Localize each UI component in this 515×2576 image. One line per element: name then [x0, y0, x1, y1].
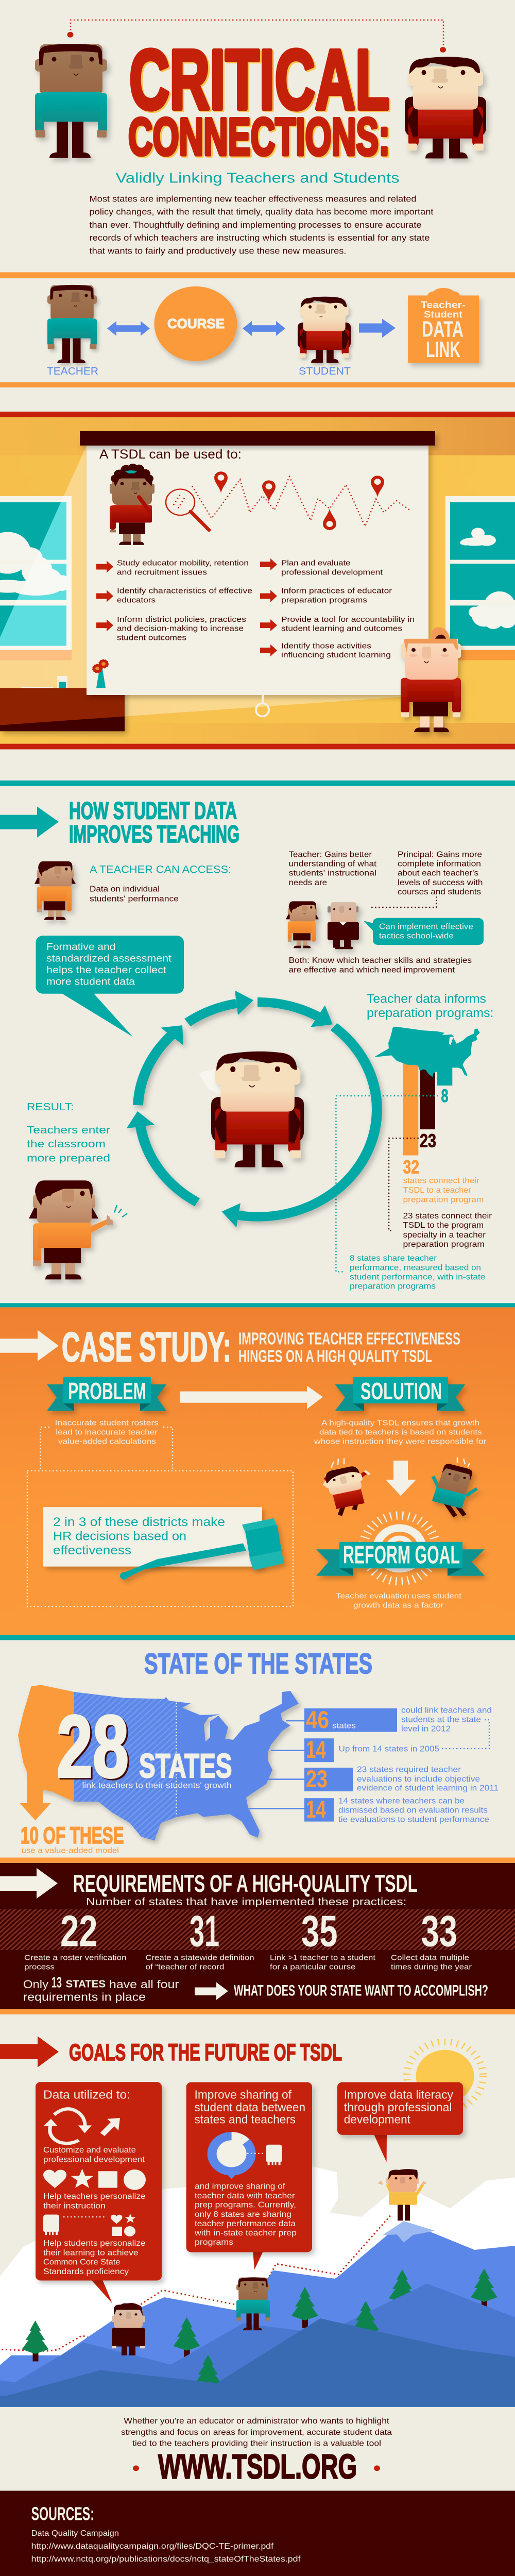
teal stats text: 8 states share teacher [350, 1254, 437, 1263]
ribbon: solution: SOLUTION [360, 1378, 442, 1404]
speech bubble: implement tactics [364, 918, 484, 945]
desk [0, 688, 125, 731]
panel: sources [0, 2491, 515, 2576]
icon: map pin 2 [262, 480, 276, 502]
ten of these callout: 10 OF THESE [21, 1823, 124, 1849]
arrow: problem to solution [180, 1386, 323, 1409]
goal box 2: improve sharing: Improve sharing of [194, 2089, 291, 2102]
teal stats text: preparation programs [350, 1282, 436, 1291]
stat: 46 states: states [332, 1721, 356, 1730]
intro paragraph: than ever. Thoughtfully defining and implementing processes to ensure accurate [90, 220, 421, 230]
stat: 23 evaluations: 23 states required teacher [357, 1765, 461, 1774]
heading: GOALS FOR THE FUTURE OF TSDL [69, 2040, 342, 2066]
motion marks [114, 1205, 127, 1217]
stat: 23 evaluations [267, 1765, 499, 1793]
tree [471, 2268, 497, 2309]
panel: how student data improves teaching [0, 781, 515, 1307]
goal box 3: data literacy: development [344, 2113, 410, 2126]
thirteen states callout: requirements in place [23, 1991, 146, 2004]
stat: 14 up from 2005: Up from 14 states in 2005 [338, 1744, 439, 1753]
mountains: middle range [0, 2283, 515, 2407]
practice descriptions: Create a roster verification [24, 1954, 126, 1962]
list: left column: and decision-making to increase [117, 624, 244, 633]
teacher gains text: needs are [289, 878, 327, 887]
icon: student with paper [199, 1052, 304, 1167]
icon: presenter woman [401, 627, 461, 732]
goal box 2: improve sharing: student data between [194, 2101, 305, 2114]
ribbon: reform goal [316, 1540, 485, 1576]
stat: 14 dismissals: tie evaluations to student performance [338, 1815, 489, 1824]
goal box 2: improve sharing: only 8 states are sharing [195, 2210, 291, 2219]
problem text: value-added calculations [58, 1437, 156, 1446]
arrow: course to student [243, 321, 285, 336]
problem text [55, 1419, 159, 1446]
orange stats text: states connect their [403, 1176, 480, 1185]
arrow: ten of these [20, 1770, 51, 1820]
teacher label: TEACHER [47, 365, 98, 377]
goal box 1: data utilized: Customize and evaluate [43, 2146, 136, 2155]
speech bubble: formative assessment: Formative and [46, 942, 115, 953]
heading: STATE OF THE STATES [144, 1648, 372, 1680]
thirteen states callout: have all four [109, 1978, 179, 1991]
mountains: front range [0, 2318, 515, 2407]
icon: large student character [405, 57, 486, 158]
screen heading: A TSDL can be used to: [99, 447, 242, 462]
solution text [314, 1419, 486, 1446]
section arrow [0, 2036, 59, 2067]
icon: woman teacher beside principal [286, 901, 319, 948]
clipboard: teacher-student data link: Teacher- [421, 300, 466, 311]
clipboard: teacher-student data link [408, 288, 479, 363]
thirteen states callout: STATES [65, 1978, 106, 1990]
icon: magnifying glass [166, 489, 209, 530]
stat: 14 dismissals [249, 1796, 489, 1824]
goal box 2: improve sharing: prep programs. Currently, [195, 2200, 296, 2209]
practice descriptions: Collect data multiple [391, 1954, 469, 1962]
list: right column: Provide a tool for accountability in [281, 616, 415, 624]
28 states callout: 28 [58, 1699, 130, 1798]
course circle: COURSE [167, 316, 225, 331]
list: left column: student outcomes [117, 634, 186, 642]
panel: state of the states [18, 1648, 499, 1855]
heading: HOW STUDENT DATA [69, 798, 237, 824]
teacher can access: students' performance [90, 894, 179, 903]
bar chart: state counts: 23 [420, 1131, 436, 1151]
course circle [154, 286, 237, 361]
dark stats text: 23 states connect their [403, 1212, 492, 1221]
thirteen states callout [23, 1974, 179, 2004]
closing text [121, 2417, 392, 2448]
goal box 1: data utilized: Standards proficiency [43, 2267, 129, 2276]
list: left column [96, 559, 252, 642]
icon: small teacher [47, 285, 97, 363]
bar chart: state counts: 8 [441, 1086, 448, 1106]
stat: 23 evaluations: evidence of student learning in 2011 [357, 1784, 499, 1793]
result text: RESULT: [27, 1100, 74, 1113]
speech bubble: implement tactics: tactics school-wide [379, 931, 454, 940]
icon: vase with flowers [93, 659, 108, 688]
list: right column: student learning and outcomes [281, 624, 402, 633]
sources heading: SOURCES: [31, 2504, 94, 2524]
snowcap [383, 2221, 435, 2243]
card: HR decisions: 2 in 3 of these districts make [53, 1515, 225, 1529]
problem text: lead to inaccurate teacher [56, 1428, 158, 1436]
teal stats text: performance, measured based on [350, 1263, 481, 1272]
goal box 3: data literacy: through professional [344, 2101, 452, 2114]
thirteen states callout: 13 [52, 1974, 62, 1991]
dark stats text: TSDL to the program [403, 1221, 484, 1230]
goal box 2: improve sharing: states and teachers [194, 2113, 296, 2126]
bar chart: state counts: 32 [403, 1157, 419, 1178]
icon: radiating sun [363, 1515, 436, 1581]
both text: Both: Know which teacher skills and strategies [289, 956, 472, 965]
sources list: http://www.dataqualitycampaign.org/files/DQC-TE-primer.pdf [31, 2542, 274, 2551]
heading: IMPROVES TEACHING [69, 821, 239, 848]
icon: map pin 4 [371, 476, 384, 497]
icon: cheering teacher [432, 1463, 477, 1516]
list: left column: Inform district policies, practices [117, 616, 246, 624]
practice descriptions: Create a statewide definition [145, 1954, 254, 1962]
goal box 1: data utilized: their learning to achieve [43, 2248, 138, 2257]
cycle arrows [127, 990, 377, 1227]
stat: 14 dismissals: 14 states where teachers can be [338, 1797, 465, 1805]
icon: principal [328, 902, 359, 949]
principal gains text: about each teacher's [398, 869, 478, 878]
practice descriptions: for a particular course [270, 1963, 356, 1971]
result text: the classroom [27, 1138, 106, 1150]
list: left column: Study educator mobility, retention [117, 559, 249, 567]
icon: girl thinking [110, 464, 154, 545]
closing text: Whether you're an educator or administrator who wants to highlight [124, 2417, 389, 2426]
subheading: Number of states that have implemented these practices: [86, 1895, 406, 1908]
sources list: http://www.nctq.org/p/publications/docs/nctq_stateOfTheStates.pdf [31, 2555, 301, 2564]
teal stats text: student performance, with in-state [350, 1273, 486, 1281]
arrow: student to data link [359, 319, 396, 338]
map of the United States [18, 1685, 299, 1841]
card: HR decisions [43, 1507, 262, 1567]
icon: teacher on the mountain [236, 2277, 270, 2330]
icon: map pin 3 [323, 509, 336, 530]
arrow [195, 1982, 228, 2000]
28 states callout: 28 [57, 1698, 129, 1796]
numbers: 22 [60, 1907, 97, 1956]
clipboard: teacher-student data link: Student [424, 310, 463, 320]
dark stats text: preparation program [403, 1240, 485, 1249]
numbers: 31 [190, 1907, 219, 1956]
result text: Teachers enter [27, 1124, 110, 1136]
tree [173, 2317, 200, 2358]
section arrow [0, 806, 59, 838]
speech bubble: formative assessment: helps the teacher collect [46, 965, 166, 976]
panel: data link diagram [0, 272, 515, 387]
numbers: 33 [421, 1907, 457, 1956]
dark stats text [403, 1212, 492, 1249]
goal box 3: data literacy [337, 2082, 463, 2162]
intro paragraph: Most states are implementing new teacher effectiveness measures and related [90, 194, 416, 204]
practice descriptions: times during the year [391, 1963, 472, 1971]
goal box 3: data literacy: Improve data literacy [344, 2089, 454, 2102]
principal gains text: levels of success with [398, 878, 483, 887]
reform goal text: Teacher evaluation uses student [336, 1592, 462, 1600]
goal box 1: data utilized: professional development [43, 2155, 145, 2164]
ten of these callout [21, 1823, 124, 1855]
icon: climber at the summit [377, 2169, 427, 2221]
projector light beam [0, 446, 402, 725]
speech bubble: implement tactics: Can implement effective [379, 922, 473, 931]
list: right column: Plan and evaluate [281, 559, 350, 567]
goal box 2: improve sharing: programs [195, 2238, 233, 2247]
list: right column: influencing student learning [281, 651, 391, 659]
cheer marks [331, 1458, 470, 1468]
closing panel [121, 2417, 392, 2486]
card: HR decisions: effectiveness [53, 1544, 131, 1557]
icon: woman thumbs up [29, 1180, 113, 1279]
speech bubble: formative assessment: standardized assessment [46, 953, 171, 964]
dotted data line [192, 477, 410, 527]
tree [352, 2301, 379, 2342]
panel: case study [0, 1307, 515, 1640]
panel: goals for the future [0, 2036, 515, 2407]
icon: large teacher character [35, 44, 107, 158]
orange stats text: TSDL to a teacher [403, 1186, 472, 1195]
teacher data heading [367, 992, 493, 1020]
teacher can access: Data on individual [90, 885, 160, 893]
goal box 2: improve sharing: with in-state teacher prep [194, 2229, 297, 2238]
paper on desk [21, 687, 53, 688]
header panel [35, 20, 486, 256]
stat: 46 states [286, 1706, 492, 1733]
practice descriptions: Link >1 teacher to a student [270, 1954, 376, 1962]
stat: 14 dismissals: dismissed based on evaluation results [338, 1806, 488, 1815]
teacher gains text: Teacher: Gains better [289, 850, 372, 859]
goal box 1: data utilized: Common Core State [43, 2258, 120, 2266]
title [128, 32, 391, 167]
principal gains text: Principal: Gains more [398, 850, 482, 859]
reform goal text: growth data as a factor [353, 1601, 444, 1609]
icons: shapes [43, 2168, 146, 2190]
thirteen states callout: Only [23, 1978, 48, 1991]
principal gains text: courses and students [398, 888, 481, 896]
principal gains text: complete information [398, 859, 481, 868]
goal box 1: data utilized: Help teachers personalize [43, 2192, 146, 2201]
result text [27, 1100, 110, 1164]
clipboard: teacher-student data link: DATA [422, 317, 464, 342]
teacher gains text: students' instructional [289, 869, 376, 878]
principal gains text [398, 850, 483, 896]
28 states callout: STATES [139, 1747, 232, 1785]
goal box 2: improve sharing: and improve sharing of [195, 2182, 285, 2191]
teacher data heading: Teacher data informs [367, 992, 486, 1006]
case study heading: CASE STUDY: [62, 1324, 231, 1370]
dark stats text: specialty in a teacher [403, 1231, 486, 1240]
website url [133, 2447, 380, 2486]
solution text: A high-quality TSDL ensures that growth [321, 1419, 479, 1427]
tree [22, 2320, 48, 2361]
left window [0, 496, 72, 660]
icon: small student [298, 297, 351, 363]
reform goal text [336, 1592, 462, 1609]
stat: 46 states: level in 2012 [401, 1724, 451, 1733]
bar chart: state counts [374, 1027, 480, 1178]
mountain path dots [2, 2215, 391, 2351]
stat: 46 states: students at the state [401, 1715, 481, 1724]
teal stats text [350, 1254, 486, 1291]
ribbon: problem [47, 1377, 166, 1411]
speech bubble: formative assessment: more student data [46, 977, 135, 987]
teacher gains text [289, 850, 377, 887]
tree [291, 2287, 318, 2328]
stat: 23 evaluations: 23 [306, 1766, 328, 1792]
list: right column: Inform practices of educator [281, 587, 392, 595]
ribbon: solution [335, 1377, 465, 1411]
subtitle: Validly Linking Teachers and Students [115, 170, 400, 186]
teacher gains text: understanding of what [289, 859, 377, 868]
goal box 2: improve sharing: teacher performance data [195, 2219, 296, 2228]
clipboard: teacher-student data link: LINK [426, 337, 460, 362]
icon: glass of water [57, 676, 67, 688]
stat: 46 states: could link teachers and [401, 1706, 492, 1715]
list: left column: Identify characteristics of effective [117, 587, 252, 595]
projection screen [80, 431, 435, 716]
result text: more prepared [27, 1151, 110, 1164]
list: right column [260, 558, 415, 659]
icon: cycle and growth arrows [44, 2109, 120, 2143]
28 states callout: link teachers to their students' growth [82, 1781, 231, 1790]
numbers [60, 1907, 457, 1956]
goal box 1: data utilized: Data utilized to: [43, 2089, 130, 2102]
list: right column: professional development [281, 568, 383, 577]
student label: STUDENT [299, 365, 351, 377]
icon: map pin 1 [214, 471, 228, 493]
numbers: 35 [301, 1907, 338, 1956]
goal box 2: improve sharing: teacher data with teacher [195, 2192, 295, 2200]
practice descriptions: process [24, 1963, 55, 1971]
mountains: back range [0, 2221, 515, 2407]
icon: teacher woman [35, 861, 76, 920]
orange stats text: preparation program [403, 1195, 484, 1204]
dotted connection between teacher and student [67, 20, 446, 53]
arrow: down [386, 1461, 416, 1496]
goal box 1: data utilized: Help students personalize [43, 2239, 145, 2248]
solution text: whose instruction they were responsible for [314, 1437, 486, 1446]
arrow: teacher to course [107, 321, 150, 336]
right window [445, 496, 515, 660]
section arrow [0, 1868, 58, 1899]
goal box 1: data utilized [36, 2082, 162, 2303]
intro paragraph: records of which teachers are instructing which students is essential for any state [90, 233, 430, 243]
ribbon: problem: PROBLEM [68, 1378, 146, 1404]
intro paragraph: policy changes, with the result that timely, quality data has become more important [90, 207, 434, 216]
closing text: tied to the teachers providing their instruction is a valuable tool [132, 2439, 381, 2448]
stat: 14 dismissals: 14 [306, 1796, 326, 1823]
tree [195, 2355, 221, 2396]
section arrow [0, 1330, 59, 1361]
tree [389, 2269, 416, 2310]
ten of these callout: use a value-added model [21, 1846, 119, 1855]
intro paragraph: that wants to fairly and productively use these new measures. [90, 246, 346, 256]
problem text: Inaccurate student rosters [55, 1419, 159, 1427]
practice descriptions: of “teacher of record [145, 1963, 224, 1971]
stat: 14 up from 2005: 14 [306, 1736, 326, 1764]
icons: student to small shapes [43, 2214, 135, 2236]
28 states callout [57, 1698, 232, 1798]
teacher data heading: preparation programs: [367, 1006, 493, 1020]
list: right column: preparation programs [281, 596, 367, 604]
practice descriptions [24, 1954, 472, 1971]
stat: 14 up from 2005 [271, 1736, 439, 1764]
stat: 23 evaluations: evaluations to include objective [357, 1775, 480, 1784]
both text [289, 956, 472, 974]
card: HR decisions: HR decisions based on [53, 1530, 186, 1543]
goal box 1: data utilized: their instruction [43, 2201, 106, 2210]
closing text: strengths and focus on areas for improvement, accurate student data [121, 2428, 392, 2437]
panel: classroom scene [0, 412, 515, 749]
icon: ring chart to person [208, 2132, 282, 2179]
speech bubble: formative assessment [36, 936, 184, 1037]
both text: are effective and which need improvement [289, 965, 455, 974]
snowy background [0, 2166, 515, 2369]
list: left column: and recruitment issues [117, 568, 207, 577]
list: right column: Identify those activities [281, 642, 371, 650]
sources list [31, 2529, 301, 2564]
icon: cheering student [322, 1465, 370, 1515]
icon: sun [407, 2042, 483, 2110]
website url: WWW.TSDL.ORG [158, 2447, 357, 2486]
solution text: data tied to teachers is based on students [319, 1428, 482, 1436]
panel: requirements [0, 1858, 515, 2014]
icon: gavel [120, 1518, 284, 1580]
teacher can access: A TEACHER CAN ACCESS: [90, 862, 231, 875]
teacher can access [90, 862, 231, 903]
sources list: Data Quality Campaign [31, 2529, 119, 2538]
intro paragraph [90, 194, 434, 256]
goal box 2: improve sharing [186, 2082, 312, 2270]
heading [69, 798, 239, 848]
orange stats text [403, 1176, 484, 1204]
stat: 46 states: 46 [306, 1706, 329, 1733]
list: left column: educators [117, 596, 156, 604]
icon: man in dark suit [112, 2303, 145, 2355]
